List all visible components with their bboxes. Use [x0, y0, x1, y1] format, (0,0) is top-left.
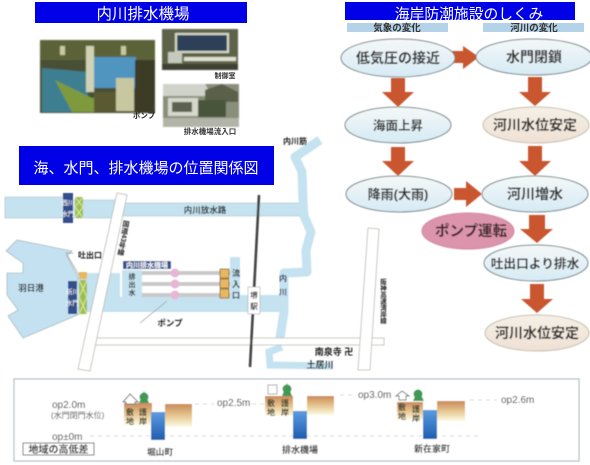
- column header: river: [483, 22, 584, 34]
- river: doshi: [269, 347, 332, 366]
- photo: building: [163, 84, 239, 127]
- map labels: 羽日港: [18, 283, 44, 293]
- caption: control room: 制御室: [214, 71, 236, 80]
- section: pump station: 排水機場: [282, 444, 318, 455]
- section: Shinzaike: 敷: [398, 402, 406, 412]
- section: Kayama: 岸: [139, 416, 147, 426]
- photo: pump: [40, 40, 155, 113]
- node: rain: 降雨(大雨): [368, 187, 428, 202]
- flow nodes: [341, 39, 590, 351]
- pump lines: [142, 271, 230, 297]
- node: gate closed: 水門閉鎖: [506, 49, 562, 65]
- road: route 43: [78, 193, 127, 371]
- map labels: 国道43号線: [116, 220, 130, 257]
- leader lines: [66, 253, 167, 323]
- map labels: 水: [128, 288, 136, 297]
- section: pump station: 敷: [267, 398, 275, 408]
- section: Kayama: 地: [126, 416, 134, 426]
- map labels: 内: [279, 273, 287, 283]
- node: rain: [346, 176, 452, 212]
- road: horizontal roads: [95, 338, 384, 345]
- heading: pump station: [35, 2, 247, 23]
- railway: [250, 195, 259, 367]
- node: low pressure: 低気圧の接近: [356, 50, 440, 66]
- column header: weather: 気象の変化: [373, 22, 421, 34]
- flow arrows: [382, 46, 553, 313]
- map labels: 内川筋: [283, 136, 307, 146]
- section: Kayama: 堀山町: [147, 446, 173, 457]
- section: Kayama: 護: [139, 407, 147, 417]
- node: discharge: 吐出口より排水: [491, 256, 580, 271]
- station: [248, 287, 260, 314]
- road: hanshin expressway: [358, 228, 379, 370]
- map labels: [18, 136, 387, 370]
- section: Kayama: [123, 391, 192, 457]
- map labels: 南泉寺 卍: [315, 346, 353, 357]
- node: pump operation: ポンプ運転: [435, 223, 508, 240]
- elevation labels: op±0m: [52, 432, 83, 443]
- map label: pump station: [123, 260, 171, 270]
- section: pump station: 地: [267, 407, 275, 417]
- section: pump station: [265, 383, 334, 455]
- caption: pump: ポンプ: [133, 111, 156, 120]
- node: sea rise: [345, 107, 451, 143]
- section: Shinzaike: 地: [398, 411, 406, 421]
- pumps: [170, 268, 180, 300]
- lower sluice gate: [66, 272, 87, 314]
- pump station basin: [120, 257, 240, 297]
- node: river stable: 河川水位安定: [493, 117, 577, 133]
- elevation labels: (水門閉門水位): [51, 410, 105, 420]
- column header: river: 河川の変化: [510, 22, 558, 34]
- map labels: 出: [128, 280, 136, 289]
- elevation labels: op2.5m: [217, 398, 250, 409]
- node: sea rise: 海面上昇: [373, 118, 423, 133]
- map labels: ポンプ: [157, 318, 183, 328]
- lower channel: [78, 273, 288, 312]
- upper sluice gate: 水門: [62, 209, 74, 218]
- map labels: 口: [232, 291, 240, 300]
- node: river stable 2: 河川水位安定: [495, 325, 579, 341]
- node: pump operation: [422, 213, 514, 249]
- section: Kayama: 敷: [126, 407, 134, 417]
- river: uchikawa: [280, 140, 320, 338]
- column header: weather: [347, 22, 448, 34]
- node: low pressure: [341, 39, 455, 77]
- node: river rise: 河川増水: [507, 186, 563, 202]
- map labels: 入: [232, 280, 240, 289]
- heading: coastal defence: 海岸防潮施設のしくみ: [395, 6, 543, 23]
- map labels: 流: [232, 268, 240, 278]
- river: top channel: [5, 197, 303, 218]
- map labels: 川: [279, 288, 287, 297]
- map labels: 土居川: [306, 359, 334, 370]
- map labels: 阪神高速湾岸線: [378, 278, 387, 325]
- heading: location map: [19, 146, 274, 185]
- heading: pump station: 内川排水機場: [96, 5, 190, 23]
- elevation labels: op3.0m: [358, 390, 391, 401]
- elevation labels: op2.0m: [52, 400, 85, 411]
- node: gate closed: [476, 39, 590, 75]
- map label: pump station: 内川排水機場: [126, 260, 168, 270]
- map: [5, 136, 387, 371]
- section: Shinzaike: 新在家町: [414, 443, 450, 454]
- upper sluice gate: [62, 193, 83, 223]
- sea: port: [6, 240, 82, 338]
- section: Shinzaike: 護: [412, 404, 420, 414]
- photo: control room: [162, 29, 238, 70]
- map labels: 排: [128, 272, 136, 281]
- node: river stable 2: [485, 315, 589, 351]
- map labels: 内川放水路: [184, 205, 227, 215]
- caption: building: 排水機場流入口: [184, 126, 236, 136]
- station: 堺: [250, 290, 258, 300]
- elevation labels: op2.6m: [501, 395, 534, 406]
- elevation labels: [51, 390, 534, 443]
- inlet gates: [220, 269, 229, 298]
- heading: coastal defence: [345, 2, 575, 23]
- station: 駅: [250, 302, 258, 311]
- section: pump station: 護: [281, 398, 289, 408]
- section: Shinzaike: [396, 389, 465, 454]
- node: river stable: [483, 107, 589, 143]
- panel: elevation: [14, 379, 579, 461]
- lower sluice gate: 新川: [66, 287, 79, 296]
- map labels: 吐出口: [78, 250, 102, 260]
- node: river rise: [482, 176, 588, 212]
- upper sluice gate: 西川: [62, 199, 74, 207]
- node: discharge: [484, 245, 588, 281]
- legend: regional elevation difference: 地域の高低差: [28, 443, 88, 456]
- section: pump station: 岸: [281, 407, 289, 417]
- reference lines: [90, 395, 497, 436]
- lower sluice gate: 水門: [66, 298, 79, 307]
- heading: location map: 海、水門、排水機場の位置関係図: [33, 160, 259, 177]
- section: Shinzaike: 岸: [412, 413, 420, 423]
